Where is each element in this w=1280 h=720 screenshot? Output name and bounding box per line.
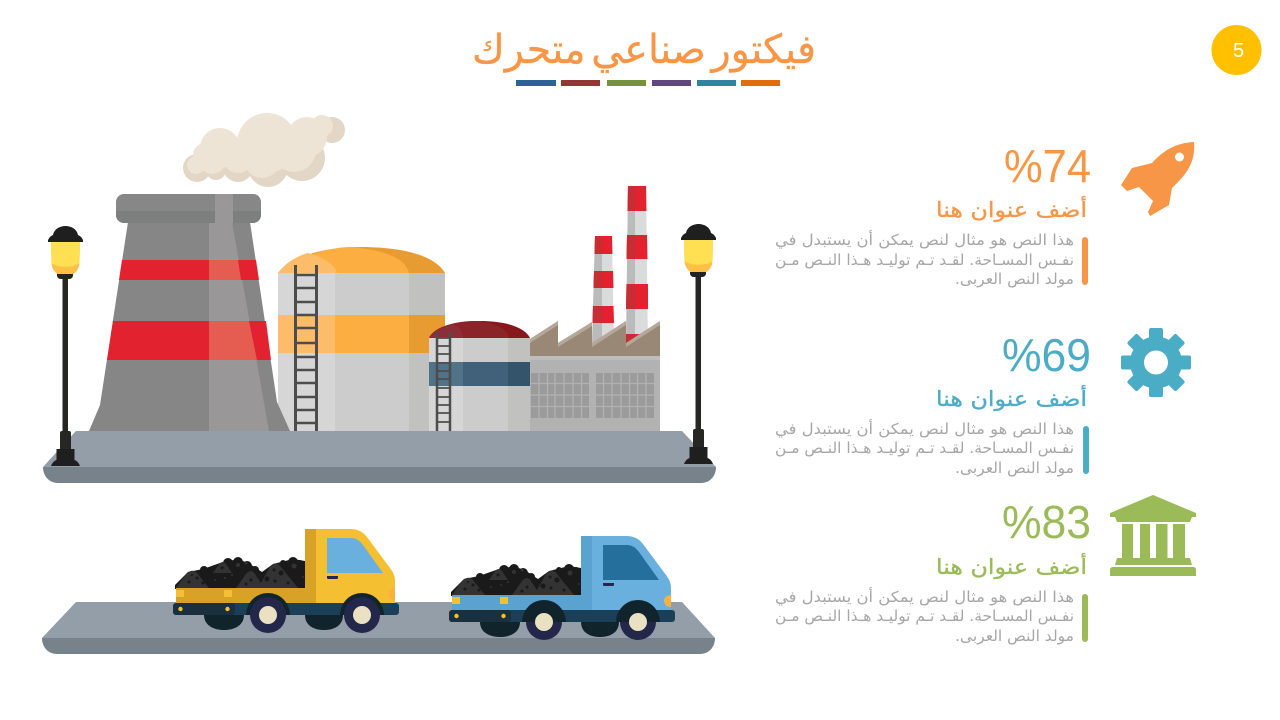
smoke cloud — [183, 113, 345, 187]
cab — [316, 529, 395, 603]
factory platform — [43, 431, 716, 483]
headlight — [664, 595, 671, 607]
icon: gear — [1121, 328, 1191, 397]
bed markers — [452, 597, 508, 604]
door handle — [603, 583, 614, 586]
chassis — [173, 603, 399, 615]
small red-domed tank — [429, 321, 530, 431]
chassis — [449, 610, 675, 622]
factory building — [530, 321, 660, 431]
road — [42, 602, 715, 654]
headlight — [388, 588, 395, 600]
percentage: %69 — [1002, 329, 1091, 381]
rear cab panel — [581, 536, 592, 610]
page number badge: 5 — [1233, 40, 1244, 62]
ladder on small tank — [437, 332, 450, 431]
body text — [775, 587, 1074, 645]
rear cab panel — [305, 529, 316, 603]
body text — [775, 419, 1074, 477]
truck body — [452, 595, 582, 610]
yellow truck — [173, 529, 399, 633]
wheels — [204, 593, 384, 633]
accent bar — [1082, 237, 1088, 285]
heading: أضف عنوان هنا — [936, 196, 1087, 222]
accent bar — [1083, 426, 1089, 474]
icon: rocket — [1121, 142, 1194, 216]
ladder on large tank — [295, 265, 317, 431]
title colour bars — [516, 80, 780, 86]
chimney: tall — [626, 186, 648, 345]
illustration: factory scene — [43, 113, 716, 483]
body text: هذا النص هو مثال لنص يمكن أن يستبدل في — [775, 419, 1074, 439]
truck body — [176, 588, 306, 603]
percentage: %74 — [1004, 140, 1091, 192]
body text: مولد النص العربى. — [955, 627, 1074, 645]
heading: أضف عنوان هنا — [936, 385, 1087, 411]
cooling tower — [89, 194, 290, 431]
icon: bank building — [1110, 495, 1196, 576]
street lamp: left — [48, 226, 83, 466]
body text: هذا النص هو مثال لنص يمكن أن يستبدل في — [775, 587, 1074, 607]
cab — [592, 536, 671, 610]
large orange tank — [278, 247, 445, 431]
blue truck — [449, 536, 675, 640]
chimney: short — [592, 236, 614, 345]
body text: نفـس المسـاحة. لقـد تـم توليـد هـذا النـص مـن — [775, 251, 1074, 269]
bed markers — [176, 590, 232, 597]
page number badge — [1212, 25, 1262, 75]
coal load — [175, 557, 305, 589]
stat block: 69% — [775, 328, 1191, 477]
stat block: 74% — [775, 140, 1194, 288]
body text: مولد النص العربى. — [955, 270, 1074, 288]
wheels — [480, 600, 660, 640]
body text: هذا النص هو مثال لنص يمكن أن يستبدل في — [775, 230, 1074, 250]
street lamp: right — [681, 224, 716, 464]
body text: مولد النص العربى. — [955, 459, 1074, 477]
heading: أضف عنوان هنا — [936, 553, 1087, 579]
accent bar — [1082, 594, 1088, 642]
cab window — [327, 538, 383, 573]
door handle — [327, 576, 338, 579]
stat block: 83% — [775, 495, 1196, 645]
coal load — [451, 564, 581, 596]
cab window — [603, 545, 659, 580]
illustration: road with trucks — [42, 529, 715, 654]
title: فيكتور صناعي متحرك — [472, 27, 816, 73]
body text: نفـس المسـاحة. لقـد تـم توليـد هـذا النـص مـن — [775, 607, 1074, 625]
body text: نفـس المسـاحة. لقـد تـم توليـد هـذا النـص مـن — [775, 439, 1074, 457]
body text — [775, 230, 1074, 288]
percentage: %83 — [1002, 496, 1091, 548]
